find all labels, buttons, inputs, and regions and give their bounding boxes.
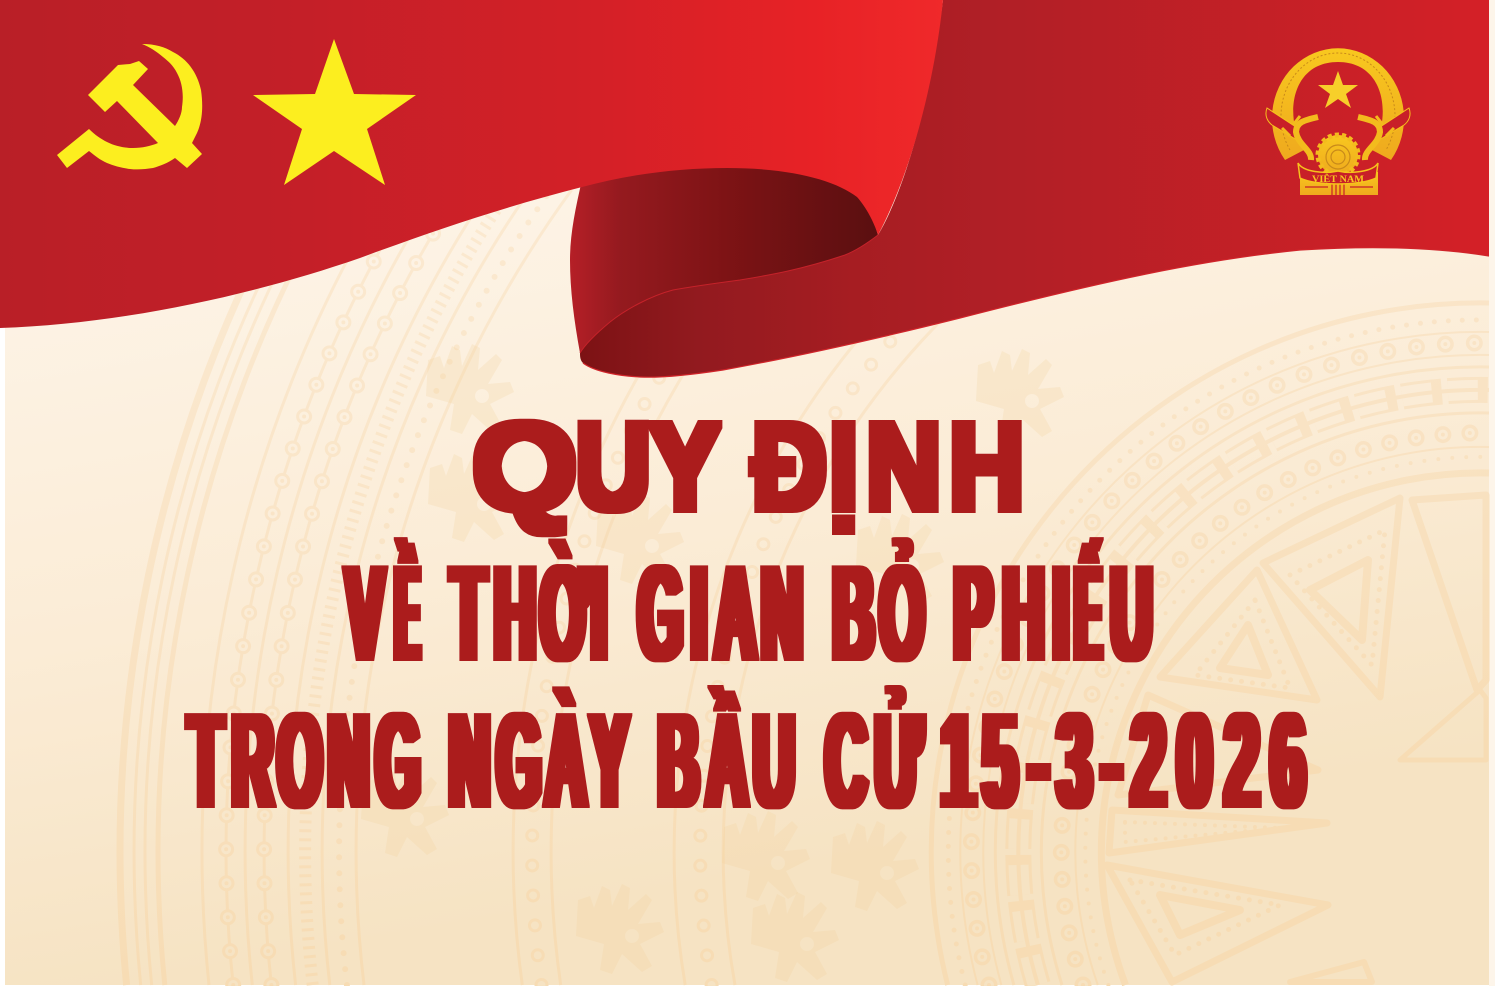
icon: national emblem bbox=[1266, 48, 1410, 195]
heading line 3 bbox=[188, 684, 1305, 837]
icon: yellow star bbox=[253, 39, 416, 185]
emblem side ribbons bbox=[1266, 108, 1410, 140]
heading line 2: VỀ THỜI GIAN BỎ PHIẾU bbox=[346, 537, 1152, 690]
emblem base bbox=[1300, 172, 1378, 195]
ribbon inner fold bbox=[570, 150, 878, 353]
emblem banner text: VIỆT NAM bbox=[1312, 172, 1364, 185]
emblem banner bbox=[1298, 163, 1378, 184]
heading line 3 date: 15-3-2026 bbox=[941, 686, 1305, 837]
bronze drum watermark bbox=[120, 190, 1489, 985]
heading line 3 words: TRONG NGÀY BẦU CỬ bbox=[188, 684, 922, 836]
emblem scrolls bbox=[1296, 117, 1380, 160]
icon: hammer and sickle bbox=[57, 44, 202, 169]
heading line 1: QUY ĐỊNH bbox=[472, 399, 1024, 536]
red ribbon banner bbox=[0, 0, 1489, 377]
emblem gear bbox=[1318, 135, 1358, 175]
emblem wreath bbox=[1272, 48, 1404, 160]
emblem star bbox=[1318, 71, 1358, 108]
title bbox=[188, 399, 1305, 837]
ribbon front band bbox=[0, 0, 943, 328]
ribbon back band bbox=[580, 0, 1489, 377]
